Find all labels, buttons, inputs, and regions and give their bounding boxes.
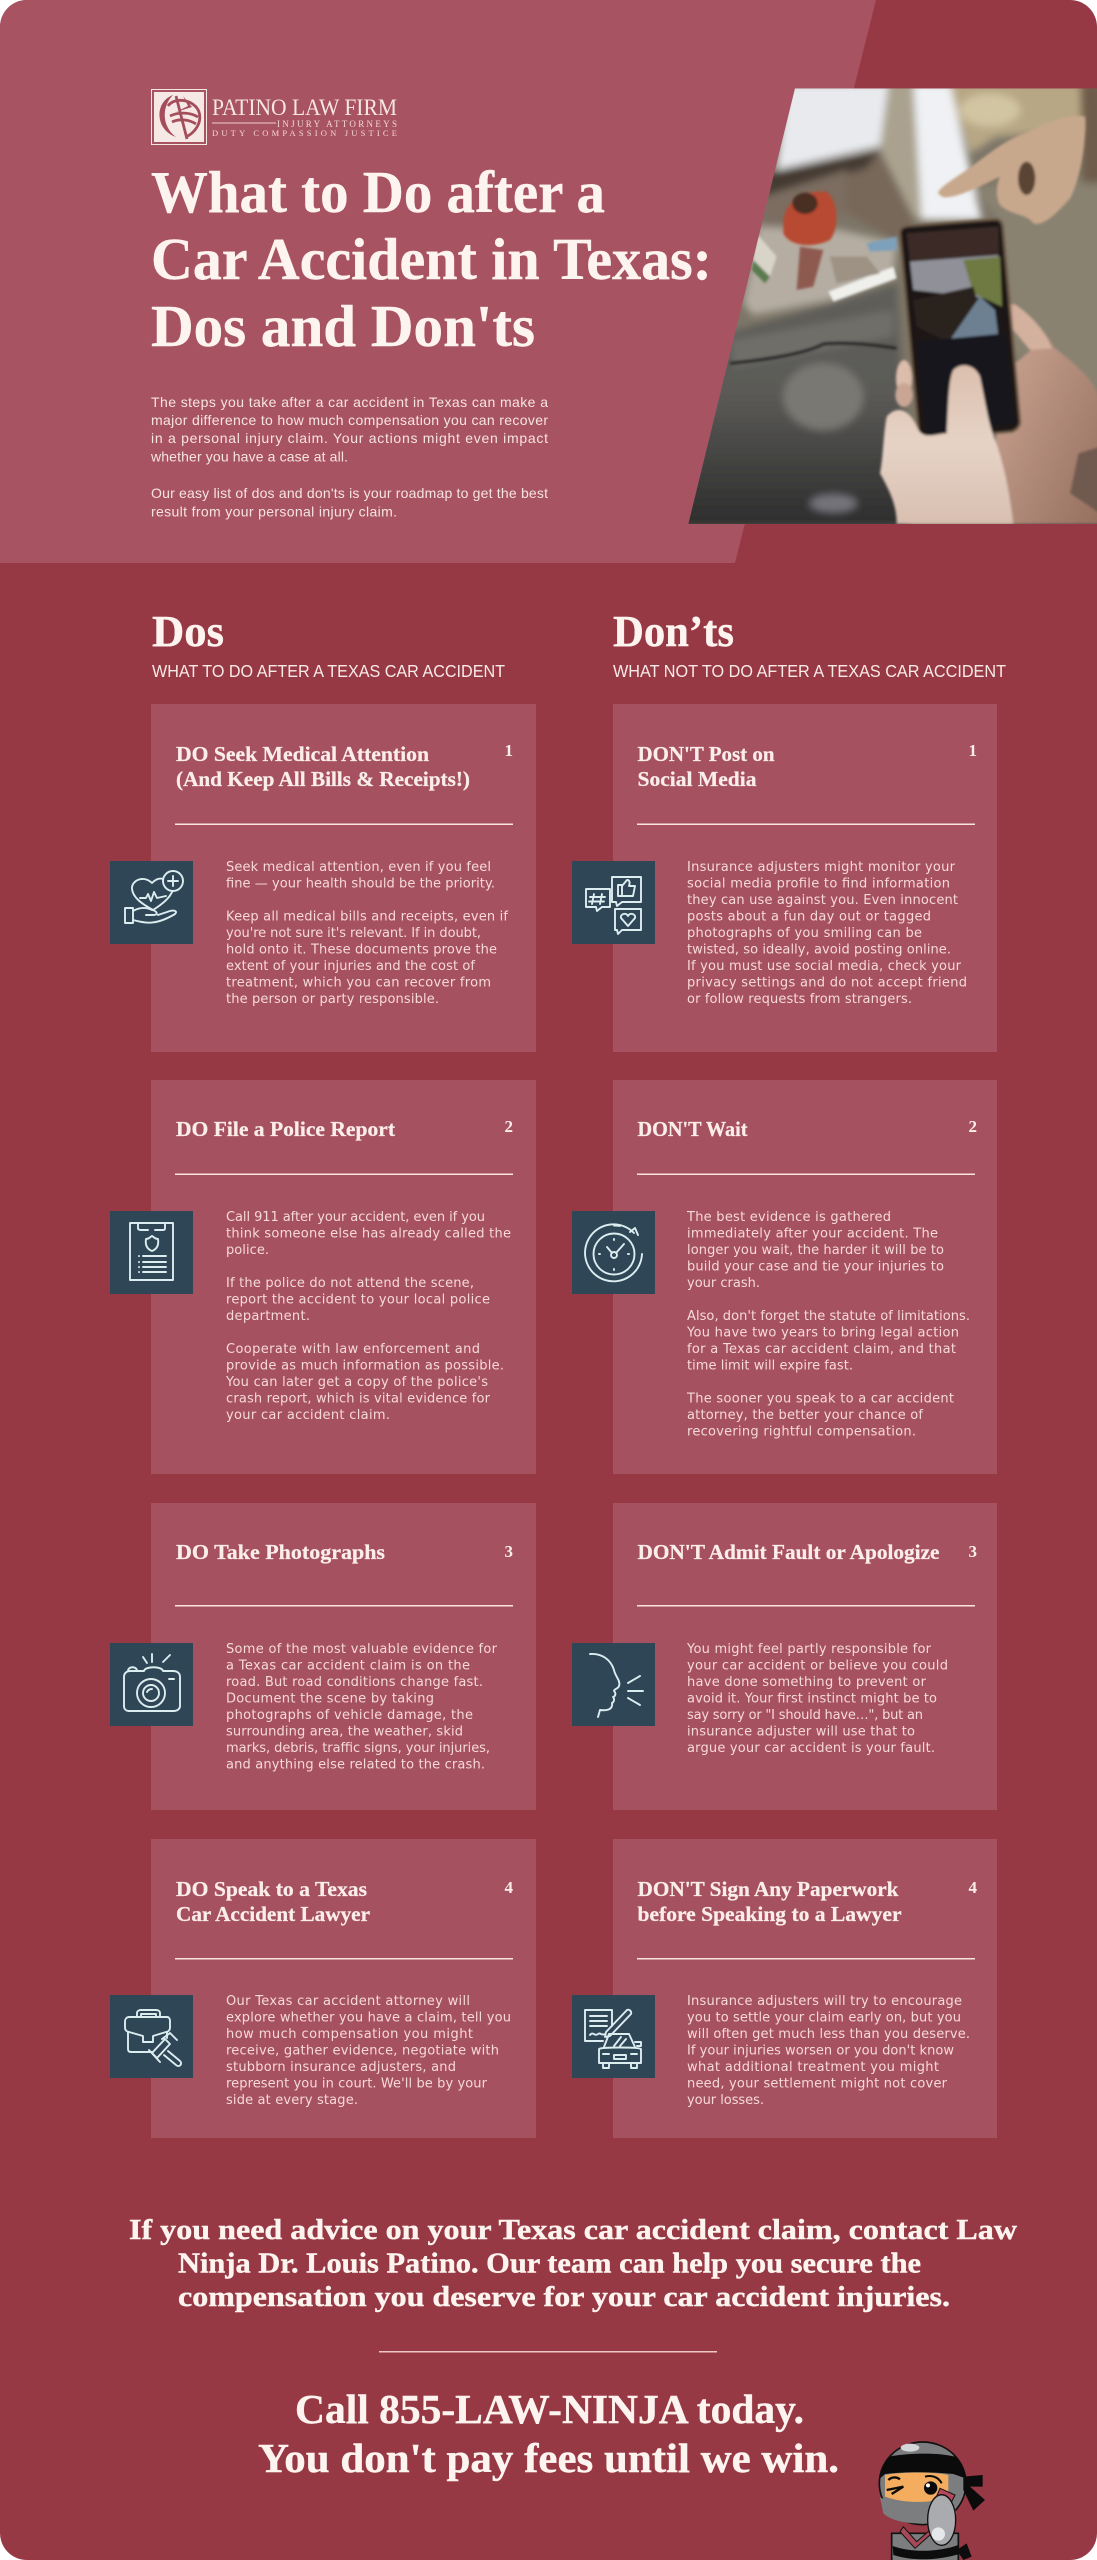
body text: you to settle your claim early on, but you: [687, 2010, 961, 2026]
panel: DO speak to a lawyer: [110, 1839, 536, 2138]
icon: stopwatch clock: [572, 1211, 655, 1294]
body text: surrounding area, the weather, skid: [226, 1724, 463, 1740]
body text: fine — your health should be the priority.: [226, 876, 495, 892]
body text: Also, don't forget the statute of limitations.: [687, 1309, 970, 1324]
body text: avoid it. Your first instinct might be to: [687, 1692, 937, 1706]
body text: time limit will expire fast.: [687, 1358, 853, 1374]
panel: DON'T admit fault or apologize: [572, 1503, 997, 1810]
body text: your crash.: [687, 1276, 760, 1291]
icon: briefcase and gavel: [110, 1995, 193, 2078]
icon: paperwork and car: [572, 1995, 655, 2078]
body text: You have two years to bring legal action: [686, 1326, 959, 1340]
panel: DON'T admit fault or apologize: DON'T Admit Fault or Apologize: [638, 1540, 940, 1564]
body text: [687, 1994, 970, 2108]
body text: your car accident or believe you could: [687, 1658, 948, 1674]
panel: DO file a police report: [110, 1080, 536, 1474]
body text: [226, 1994, 511, 2108]
body text: If your injuries worsen or you don't know: [687, 2044, 954, 2058]
body text: The sooner you speak to a car accident: [686, 1392, 954, 1406]
ninja mascot: [879, 2442, 985, 2560]
body text: police.: [226, 1243, 269, 1258]
body text: for a Texas car accident claim, and that: [687, 1342, 956, 1357]
body text: and anything else related to the crash.: [226, 1758, 485, 1772]
body text: Call 911 after your accident, even if you: [226, 1210, 485, 1225]
body text: privacy settings and do not accept friend: [687, 976, 967, 990]
body text: they can use against you. Even innocent: [687, 893, 958, 908]
body text: how much compensation you might: [226, 2027, 473, 2042]
panel: DO seek medical attention: (And Keep All Bills & Receipts!): [176, 767, 470, 791]
body text: marks, debris, traffic signs, your injuries,: [226, 1741, 490, 1756]
body text: think someone else has already called the: [226, 1226, 511, 1242]
heading: Don'ts: Don’ts: [613, 607, 734, 656]
body text: extent of your injuries and the cost of: [226, 959, 475, 974]
body text: If you must use social media, check your: [687, 959, 962, 974]
body text: your losses.: [687, 2093, 764, 2108]
title: [152, 170, 707, 347]
body text: [686, 1642, 948, 1756]
intro text: in a personal injury claim. Your actions might even impact: [151, 430, 548, 446]
panel: DO file a police report: 2: [504, 1117, 513, 1136]
panel: DO speak to a lawyer: Car Accident Lawyer: [176, 1902, 370, 1926]
heading: Dos: [152, 616, 505, 677]
panel: DON'T sign any paperwork: [572, 1839, 997, 2138]
logo: Patino Law Firm: PATINO LAW FIRM: [212, 95, 397, 120]
body text: need, your settlement might not cover: [687, 2076, 948, 2092]
body text: longer you wait, the harder it will be to: [687, 1243, 944, 1258]
body text: You might feel partly responsible for: [686, 1642, 932, 1657]
body text: immediately after your accident. The: [687, 1226, 938, 1242]
body text: you're not sure it's relevant. If in doubt,: [226, 926, 481, 941]
panel: DO take photographs: DO Take Photographs: [176, 1540, 385, 1564]
body text: Our Texas car accident attorney will: [226, 1994, 470, 2009]
panel: DO seek medical attention: DO Seek Medical Attention: [176, 742, 429, 766]
body text: [687, 860, 967, 1007]
heading: Don'ts: [613, 616, 1006, 677]
logo: Patino Law Firm: DUTY COMPASSION JUSTICE: [212, 128, 397, 138]
body text: hold onto it. These documents prove the: [226, 942, 497, 958]
body text: stubborn insurance adjusters, and: [226, 2060, 456, 2075]
body text: say sorry or "I should have…", but an: [687, 1708, 923, 1723]
body text: Insurance adjusters will try to encourage: [687, 1994, 962, 2009]
body text: side at every stage.: [226, 2093, 358, 2108]
body text: a Texas car accident claim is on the: [226, 1658, 470, 1674]
body text: what additional treatment you might: [687, 2060, 939, 2075]
call to action: Call 855-LAW-NINJA today.: [295, 2386, 804, 2432]
body text: or follow requests from strangers.: [687, 992, 912, 1007]
panel: DO file a police report: DO File a Police Report: [176, 1117, 395, 1141]
body text: [686, 1210, 970, 1440]
panel: DON'T wait: 2: [968, 1117, 977, 1136]
body text: photographs of vehicle damage, the: [226, 1708, 473, 1723]
panel: DON'T wait: [572, 1080, 997, 1474]
body text: [226, 1642, 498, 1772]
body text: Document the scene by taking: [226, 1692, 434, 1706]
logo: Patino Law Firm: [152, 90, 397, 144]
closing statement: compensation you deserve for your car accident injuries.: [178, 2281, 950, 2313]
panel: DON'T sign any paperwork: 4: [968, 1878, 978, 1897]
body text: photographs of you smiling can be: [687, 926, 922, 941]
body text: Insurance adjusters might monitor your: [687, 860, 956, 875]
panel: DO seek medical attention: 1: [504, 741, 513, 760]
closing statement: If you need advice on your Texas car accident claim, contact Law: [129, 2214, 1017, 2246]
body text: Some of the most valuable evidence for: [226, 1642, 498, 1657]
header panel: [0, 0, 876, 563]
panel: DON'T sign any paperwork: DON'T Sign Any Paperwork: [638, 1877, 899, 1901]
body text: crash report, which is vital evidence for: [226, 1392, 491, 1406]
body text: attorney, the better your chance of: [687, 1408, 923, 1423]
body text: Keep all medical bills and receipts, even if: [226, 910, 508, 924]
body text: recovering rightful compensation.: [687, 1424, 916, 1440]
panel: DO take photographs: 3: [504, 1542, 513, 1561]
intro text: [150, 394, 548, 520]
panel: DO speak to a lawyer: DO Speak to a Texas: [176, 1877, 367, 1901]
panel: DON'T post on social media: Social Media: [638, 767, 757, 791]
body text: report the accident to your local police: [226, 1292, 490, 1308]
body text: will often get much less than you deserve.: [687, 2027, 970, 2042]
intro text: major difference to how much compensation you can recover: [151, 412, 548, 428]
icon: heart in hand: [110, 861, 193, 944]
body text: [226, 860, 508, 1007]
body text: Cooperate with law enforcement and: [226, 1342, 480, 1357]
body text: receive, gather evidence, negotiate with: [226, 2044, 499, 2058]
panel: DON'T wait: DON'T Wait: [638, 1117, 748, 1141]
heading: Dos: WHAT TO DO AFTER A TEXAS CAR ACCIDENT: [152, 661, 505, 681]
body text: You can later get a copy of the police's: [225, 1375, 488, 1390]
body text: argue your car accident is your fault.: [687, 1741, 935, 1756]
panel: DO seek medical attention: [110, 704, 536, 1052]
panel: DON'T admit fault or apologize: 3: [968, 1542, 977, 1561]
icon: speaking face profile: [572, 1643, 655, 1726]
closing statement: Ninja Dr. Louis Patino. Our team can help you secure the: [178, 2248, 921, 2280]
title: Car Accident in Texas:: [151, 226, 712, 292]
body text: Seek medical attention, even if you feel: [226, 860, 491, 875]
body text: twisted, so ideally, avoid posting online.: [687, 942, 951, 958]
icon: camera: [110, 1643, 193, 1726]
panel: DON'T post on social media: DON'T Post on: [638, 742, 775, 766]
icon: social media bubbles: [572, 861, 655, 944]
body text: the person or party responsible.: [226, 992, 439, 1007]
logo: Patino Law Firm: INJURY ATTORNEYS: [277, 119, 397, 129]
body text: your car accident claim.: [226, 1408, 390, 1423]
body text: The best evidence is gathered: [686, 1210, 891, 1225]
icon: police report clipboard: [110, 1211, 193, 1294]
heading: Dos: Dos: [152, 607, 224, 656]
body text: insurance adjuster will use that to: [687, 1724, 915, 1740]
panel: DON'T post on social media: [572, 704, 997, 1052]
intro text: Our easy list of dos and don'ts is your roadmap to get the best: [151, 485, 548, 501]
body text: [225, 1210, 511, 1423]
call to action: You don't pay fees until we win.: [258, 2435, 839, 2481]
body text: explore whether you have a claim, tell you: [226, 2010, 511, 2026]
intro text: whether you have a case at all.: [150, 448, 348, 464]
body text: build your case and tie your injuries to: [687, 1260, 944, 1274]
panel: DON'T sign any paperwork: before Speaking to a Lawyer: [638, 1902, 902, 1926]
call to action: [258, 2386, 839, 2481]
body text: posts about a fun day out or tagged: [687, 910, 931, 924]
intro text: The steps you take after a car accident in Texas can make a: [151, 394, 548, 410]
body text: road. But road conditions change fast.: [226, 1675, 483, 1690]
body text: If the police do not attend the scene,: [226, 1276, 474, 1291]
body text: treatment, which you can recover from: [226, 976, 491, 990]
body text: represent you in court. We'll be by your: [226, 2076, 488, 2092]
panel: DO speak to a lawyer: 4: [504, 1878, 514, 1897]
intro text: result from your personal injury claim.: [151, 504, 397, 520]
panel: DO take photographs: [110, 1503, 536, 1810]
title: Dos and Don'ts: [151, 293, 535, 359]
body text: social media profile to find information: [687, 876, 950, 892]
body text: department.: [226, 1309, 310, 1324]
title: What to Do after a: [151, 159, 605, 225]
body text: provide as much information as possible.: [226, 1358, 504, 1374]
closing statement: [129, 2214, 1017, 2313]
heading: Don'ts: WHAT NOT TO DO AFTER A TEXAS CAR ACCIDENT: [613, 661, 1006, 681]
body text: have done something to prevent or: [687, 1675, 927, 1690]
header photo: phone photographing car damage: [680, 83, 1097, 527]
panel: DON'T post on social media: 1: [968, 741, 977, 760]
